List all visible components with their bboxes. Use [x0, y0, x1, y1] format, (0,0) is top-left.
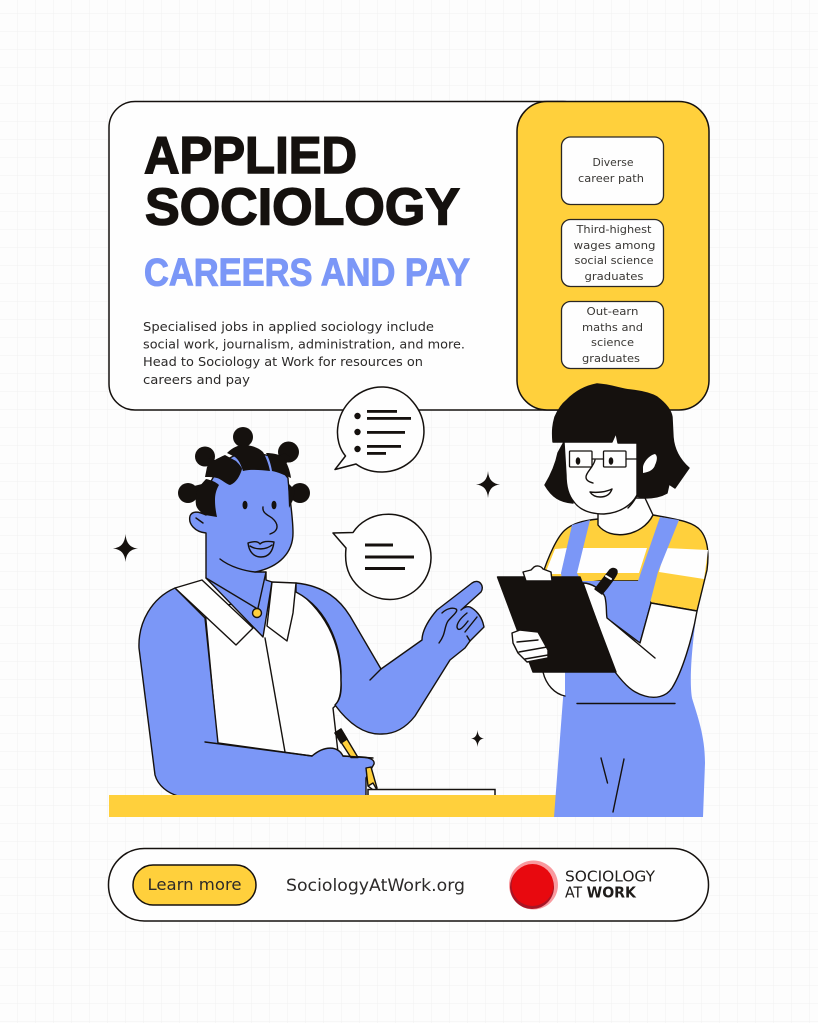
striped shirt: [542, 515, 708, 611]
card: third-highest wages: graduates: [584, 270, 644, 283]
panel: yellow highlights: [517, 102, 709, 410]
card: diverse career path: Diverse: [592, 156, 634, 169]
button: learn more: [133, 865, 256, 905]
arm: [583, 583, 697, 697]
hair back: [545, 384, 689, 503]
card: third-highest wages: wages among: [574, 239, 656, 252]
neck and head: [190, 450, 293, 637]
facial features: [243, 501, 247, 509]
overall straps and bib: [561, 517, 679, 643]
illustration: standing woman with clipboard: [498, 384, 708, 817]
title: Applied Sociology: [144, 127, 460, 236]
body text: Head to Sociology at Work for resources on: [143, 354, 423, 369]
speech bubble: bulleted list: [335, 387, 424, 472]
finger lines: [370, 608, 477, 680]
button: learn more: Learn more: [148, 875, 242, 894]
paper sheet: [368, 790, 495, 795]
icon: sparkles: [113, 471, 500, 747]
body text: social work, journalism, administration, and more.: [143, 336, 465, 352]
card: out-earn maths and science: [562, 302, 664, 368]
logo: red circles: [509, 860, 558, 910]
body text: careers and pay: [143, 372, 251, 387]
pen: [595, 569, 617, 594]
waist and pocket lines: [577, 704, 675, 812]
desk: [109, 795, 556, 817]
torso shirt: [205, 590, 341, 770]
card: diverse career path: career path: [578, 172, 644, 185]
left shoulder and forearm: [139, 588, 374, 796]
lower arm: [543, 672, 565, 696]
card: third-highest wages: Third-highest: [575, 223, 652, 236]
card: out-earn maths and science: graduates: [582, 352, 640, 365]
speech bubble: text lines: [333, 514, 431, 599]
hair: [178, 427, 310, 517]
website url: SociologyAtWork.org: [286, 876, 465, 896]
logo wordmark: [565, 868, 656, 902]
title: Applied Sociology: APPLIED: [144, 127, 357, 185]
card: out-earn maths and science: science: [591, 336, 634, 349]
subtitle: careers and pay: CAREERS AND PAY: [144, 252, 470, 294]
body text: [143, 319, 465, 387]
white shirt stripes: [545, 548, 567, 574]
panel: footer bar: [108, 848, 708, 921]
card: out-earn maths and science: Out-earn: [586, 305, 639, 318]
ear: [643, 454, 657, 473]
card: diverse career path: [562, 137, 664, 204]
overalls: [554, 577, 705, 817]
card: third-highest wages: social science: [574, 254, 654, 267]
pointing arm: [296, 581, 484, 734]
body text: Specialised jobs in applied sociology include: [143, 319, 434, 334]
card: third-highest wages: [562, 220, 664, 286]
illustration: seated woman pointing: [139, 427, 484, 796]
glasses: [570, 451, 638, 467]
nose: [586, 460, 595, 483]
hand on clipboard: [512, 630, 548, 662]
logo wordmark: AT WORK: [565, 884, 637, 902]
clipboard: [498, 577, 616, 672]
card: out-earn maths and science: maths and: [582, 321, 643, 334]
collars: [175, 580, 253, 645]
neck and collar: [598, 498, 653, 535]
face: [564, 433, 637, 514]
title: Applied Sociology: SOCIOLOGY: [145, 178, 460, 236]
logo wordmark: SOCIOLOGY: [565, 868, 656, 886]
pencil: [335, 729, 377, 792]
panel: header card: [109, 102, 589, 410]
mouth: [590, 489, 612, 497]
necklace: [206, 572, 266, 608]
